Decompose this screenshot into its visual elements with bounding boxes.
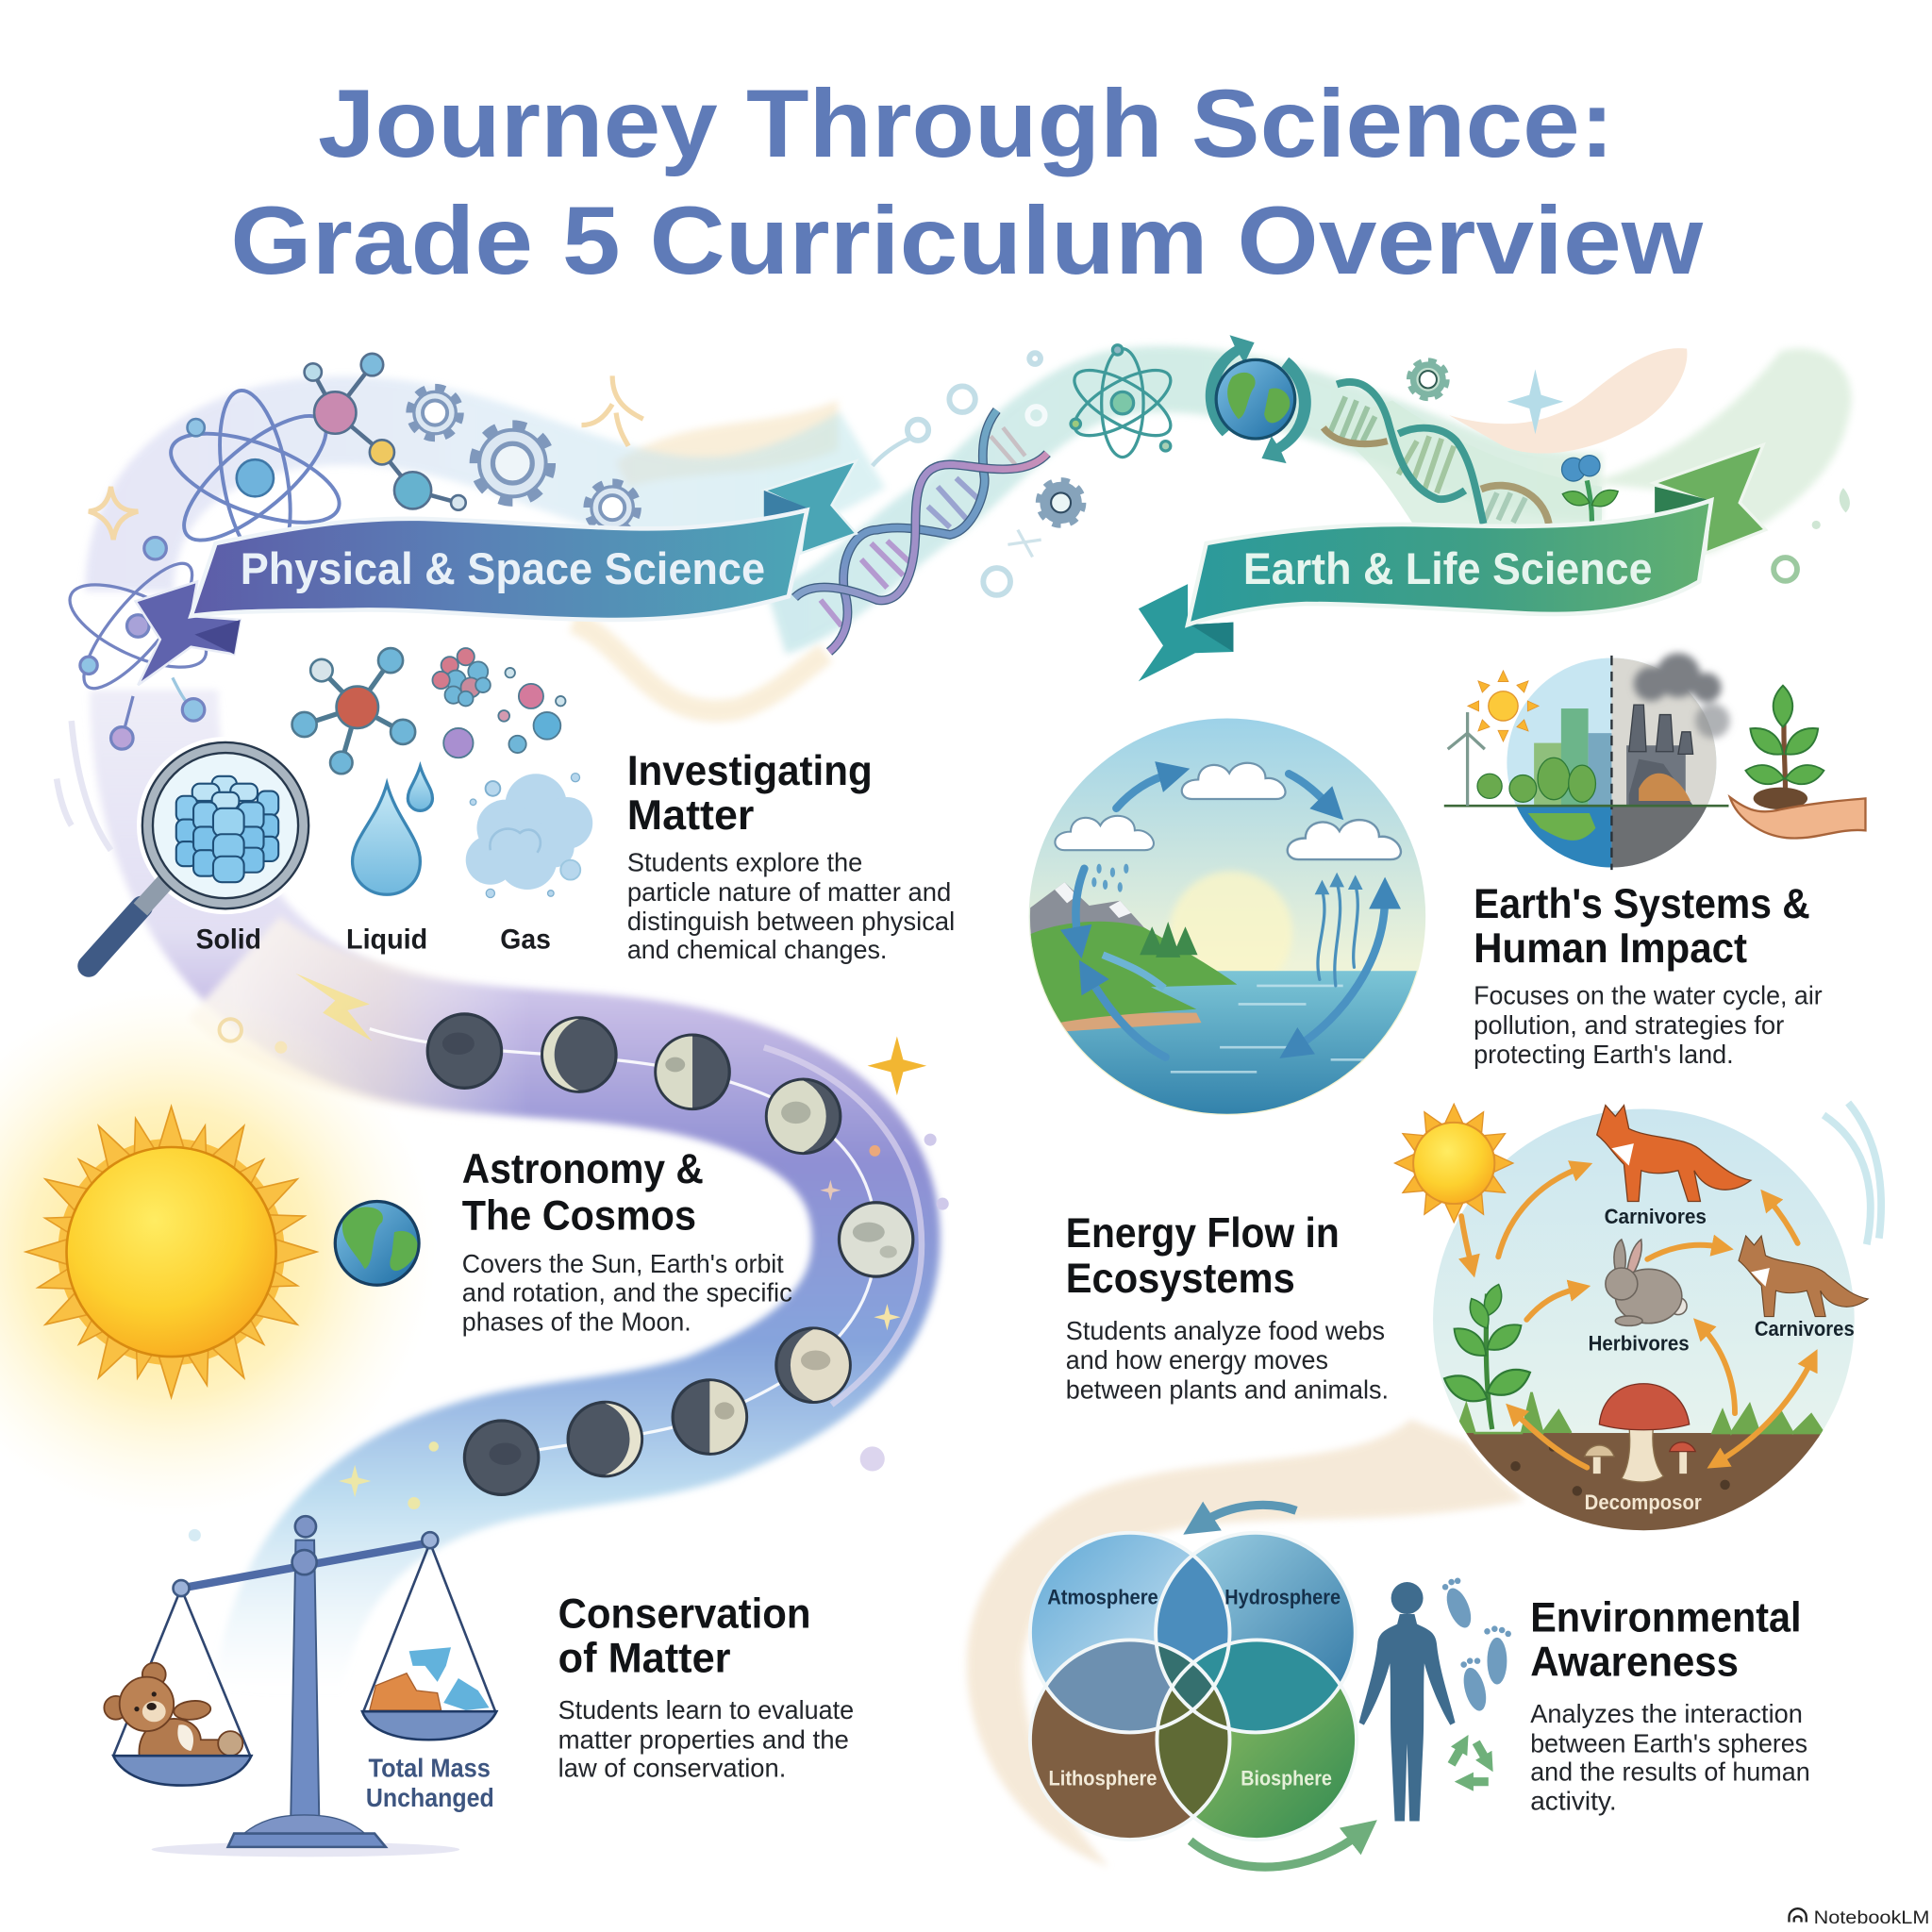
text block: Investigating Matter: particle nature of matter and [627,877,951,907]
food web labels: Carnivores [1605,1205,1707,1228]
label: Solid: Solid [196,924,261,956]
label: Total Mass Unchanged: Unchanged [366,1783,494,1812]
background swoosh: left and right science streams [129,348,1852,711]
text block: Earth's Systems & Human Impact: Human Impact [1474,925,1747,972]
text block: Conservation of Matter [558,1591,854,1782]
label: Gas: Gas [500,924,551,956]
decorative sparks near moon path [219,974,949,1472]
icon: gas cloud [466,774,592,898]
moon: waxing crescent [542,1018,616,1091]
text block: Energy Flow in Ecosystems: Students analyze food webs [1066,1316,1385,1345]
food web labels: Decomposor [1585,1491,1702,1514]
text block: Earth's Systems & Human Impact: pollution, and strategies for [1474,1010,1784,1040]
food web labels [1585,1205,1855,1514]
text block: Conservation of Matter: law of conservation. [558,1753,786,1782]
icon: earth near sun [335,1201,419,1285]
moon: new again [464,1421,539,1494]
text block: Energy Flow in Ecosystems: Ecosystems [1066,1256,1295,1302]
text block: Investigating Matter: Matter [627,792,754,839]
text block: Investigating Matter: and chemical changes. [627,935,887,964]
icon: sprout with blue flower [1560,456,1622,523]
right DNA helix [1324,382,1549,524]
banner: Earth & Life Science [1139,445,1766,681]
food web labels: Carnivores [1755,1317,1855,1341]
fox [1597,1106,1751,1201]
icon: seedling in hand [1730,686,1865,839]
label: Liquid: Liquid [346,924,427,956]
plant [1440,1282,1535,1429]
moon: half right [673,1380,747,1454]
icon: molecule with central atom [292,648,415,774]
text block: Environmental Awareness: activity. [1530,1787,1617,1816]
icon: top molecule [305,354,466,510]
icon: magnifier over ice cube [89,737,314,966]
text block: Energy Flow in Ecosystems: Energy Flow in [1066,1210,1340,1257]
sun with glow [0,987,436,1517]
moon: gibbous right [776,1328,850,1402]
icon: left small atom [58,537,218,749]
icon: footprints [1441,1577,1511,1713]
title: Journey Through Science: [318,70,1614,177]
NotebookLM watermark: NotebookLM [1814,1907,1929,1928]
text block: Astronomy & The Cosmos: Covers the Sun, Earth's orbit [462,1249,784,1278]
moon: gibbous left [766,1079,841,1154]
human impact illustration [1444,653,1730,874]
text block: Conservation of Matter: Students learn to evaluate [558,1695,854,1724]
text block: Astronomy & The Cosmos: phases of the Moon. [462,1307,691,1337]
text block: Conservation of Matter: of Matter [558,1635,731,1681]
middle DNA helix [794,410,1047,652]
text block: Astronomy & The Cosmos [462,1146,792,1337]
balance scale [104,1516,496,1857]
icon: recycle symbol [1452,1742,1489,1782]
moon phases along the path [427,1014,913,1494]
text block: Environmental Awareness [1530,1594,1810,1816]
rabbit [1606,1240,1687,1325]
river sparkles [189,1180,901,1541]
label: Total Mass Unchanged [366,1753,494,1812]
sphere labels: Lithosphere [1049,1767,1157,1790]
icon: human silhouette [1359,1582,1456,1821]
rocks on right pan [370,1647,490,1710]
text block: Energy Flow in Ecosystems: between plants and animals. [1066,1374,1389,1404]
icon: nucleus cluster and loose particles [432,648,566,758]
fox two [1739,1236,1868,1317]
icon: globe with cycle arrows [1206,335,1311,463]
beige swoosh around spheres [967,1420,1524,1867]
text block: Earth's Systems & Human Impact: Earth's Systems & [1474,881,1810,927]
text block: Earth's Systems & Human Impact: protecting Earth's land. [1474,1040,1734,1069]
text block: Investigating Matter: distinguish between physical [627,907,955,936]
banner: Earth & Life Science: Earth & Life Science [1243,543,1653,593]
sphere labels: Hydrosphere [1224,1586,1341,1609]
moon: half left [656,1035,729,1109]
text block: Conservation of Matter: matter properties and the [558,1724,849,1754]
text block: Astronomy & The Cosmos: The Cosmos [462,1193,696,1240]
text block: Investigating Matter [627,748,955,964]
sphere labels: Biosphere [1241,1767,1332,1790]
mushrooms [1585,1384,1695,1482]
text block: Environmental Awareness: and the results of human [1530,1757,1810,1786]
moon: waning crescent [568,1402,641,1476]
text block: Investigating Matter: Investigating [627,748,873,794]
moon-phase river band [57,690,922,1694]
text block: Earth's Systems & Human Impact [1474,881,1823,1069]
text block: Investigating Matter: Students explore the [627,847,862,876]
banner: Physical & Space Science: Physical & Space Science [241,543,765,593]
text block: Conservation of Matter: Conservation [558,1591,810,1637]
text block: Environmental Awareness: Analyzes the interaction [1530,1699,1803,1728]
icon: large atom [159,385,350,571]
text block: Earth's Systems & Human Impact: Focuses on the water cycle, air [1474,980,1823,1009]
icon: peach sparkles [89,375,643,540]
text block: Environmental Awareness: between Earth's spheres [1530,1728,1807,1757]
text block: Astronomy & The Cosmos: and rotation, and the specific [462,1277,792,1307]
sun [1395,1104,1513,1223]
text block: Astronomy & The Cosmos: Astronomy & [462,1146,704,1192]
teddy bear [104,1663,242,1756]
water cycle circle [1017,718,1441,1124]
sphere labels: Atmosphere [1047,1586,1158,1609]
text block: Energy Flow in Ecosystems: and how energy moves [1066,1345,1328,1374]
sphere labels [1047,1586,1341,1790]
icon: gears [410,388,637,532]
energy arrows [1461,1168,1811,1468]
text block: Environmental Awareness: Environmental [1530,1594,1802,1641]
food web labels: Herbivores [1589,1332,1690,1356]
upper decorative circles and middle gear [873,353,1082,595]
text block: Energy Flow in Ecosystems [1066,1210,1389,1404]
title [230,70,1704,294]
icon: teal atom [1065,345,1180,458]
text block: Environmental Awareness: Awareness [1530,1639,1739,1685]
icon: small gear top right [1411,362,1445,397]
icon: water drops [353,766,432,894]
moon: new [427,1014,502,1088]
moon: full [839,1203,913,1276]
extra green dots [1774,488,1850,581]
icon: blue sparkle [1507,369,1563,434]
title: Grade 5 Curriculum Overview [230,187,1704,294]
banner: Physical & Space Science [136,460,857,685]
earth spheres venn diagram [1023,1505,1368,1867]
label: Total Mass Unchanged: Total Mass [369,1753,491,1782]
food web circle [1395,1103,1881,1544]
